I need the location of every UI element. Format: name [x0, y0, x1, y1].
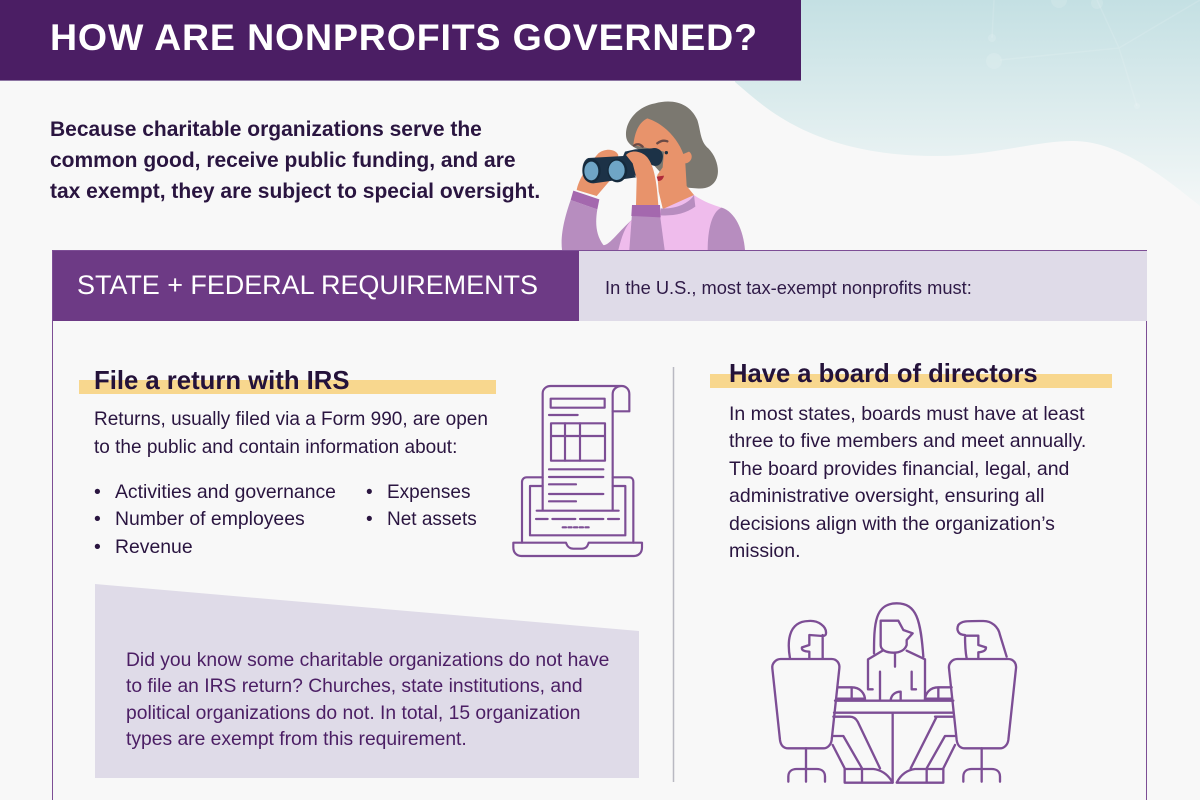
text: board: administrative oversight, ensuring all — [729, 485, 1044, 507]
highlight bar left — [79, 380, 496, 394]
section heading — [53, 251, 579, 321]
text: board: In most states, boards must have at least — [729, 403, 1085, 425]
title banner — [0, 0, 801, 80]
heading: have a board: Have a board of directors — [729, 360, 1038, 388]
bullet list right: Expenses — [387, 482, 470, 503]
icon: board meeting — [771, 602, 1018, 784]
bullet list left: Activities and governance — [115, 481, 336, 503]
title: HOW ARE NONPROFITS GOVERNED? — [50, 16, 758, 58]
bullet list right: • — [366, 482, 373, 503]
heading: file a return: File a return with IRS — [94, 367, 349, 395]
bullet list left: • — [94, 536, 101, 558]
icon: form on laptop — [512, 384, 644, 558]
bullet list left: Revenue — [115, 536, 193, 558]
text: board — [729, 403, 1086, 562]
bullet list right: • — [366, 509, 373, 530]
callout text: political organizations do not. In total, 15 organization — [126, 703, 580, 724]
panel: state + federal requirements — [52, 250, 1147, 800]
intro text — [50, 118, 540, 203]
callout text: types are exempt from this requirement. — [126, 729, 467, 750]
text: returns: Returns, usually filed via a Form 990, are open — [94, 409, 488, 430]
callout text — [126, 650, 609, 750]
text: board: The board provides financial, legal, and — [729, 458, 1069, 480]
intro text: tax exempt, they are subject to special oversight. — [50, 180, 540, 203]
bullet list left: Number of employees — [115, 508, 305, 530]
section heading text: STATE + FEDERAL REQUIREMENTS — [77, 270, 538, 300]
highlight bar right — [710, 374, 1112, 388]
bullet list right: Net assets — [387, 509, 477, 530]
text: board: three to five members and meet annually. — [729, 430, 1086, 452]
strip text: In the U.S., most tax-exempt nonprofits must: — [605, 277, 972, 298]
text: board: mission. — [729, 540, 801, 562]
callout text: Did you know some charitable organizations do not have — [126, 650, 609, 671]
intro text: common good, receive public funding, and are — [50, 149, 516, 172]
callout text: to file an IRS return? Churches, state institutions, and — [126, 676, 583, 697]
subtitle strip — [579, 251, 1147, 321]
text: returns: to the public and contain information about: — [94, 436, 457, 458]
intro text: Because charitable organizations serve the — [50, 118, 482, 141]
bullet list left: • — [94, 508, 101, 530]
bullet list left — [94, 481, 336, 558]
callout: did you know — [95, 584, 639, 778]
bullet list right — [366, 482, 477, 530]
callout shape — [95, 584, 639, 778]
text: returns — [94, 409, 488, 458]
bullet list left: • — [94, 481, 101, 503]
text: board: decisions align with the organization’s — [729, 513, 1055, 535]
